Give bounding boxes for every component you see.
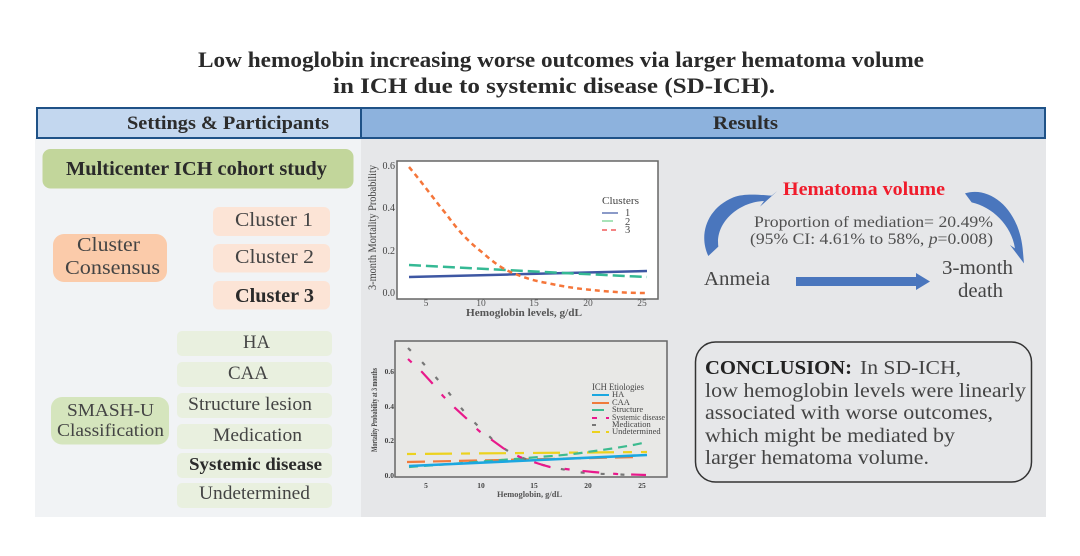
box: CAA <box>177 362 332 387</box>
label: hematoma volume: Hematoma volume <box>783 179 945 200</box>
legend: clusters: 2 <box>625 217 630 228</box>
heading: settings and participants <box>37 108 361 138</box>
chart: mortality by ICH etiology: Mortality Probability at 3 months <box>370 368 379 452</box>
chart: mortality by ICH etiology: 0.0 <box>385 471 394 480</box>
legend: ICH etiologies: Medication <box>612 419 651 429</box>
heading: results <box>361 108 1045 138</box>
arrow: hematoma volume to death <box>965 192 1024 263</box>
box: cluster 2 <box>213 244 330 272</box>
callout: conclusion: CONCLUSION: <box>705 358 852 379</box>
legend: ICH etiologies <box>592 383 665 436</box>
chart: mortality by ICH etiology: Hemoglobin, g/dL <box>497 489 562 499</box>
chart: mortality by ICH etiology: 20 <box>584 481 592 490</box>
line: CAA <box>407 457 640 462</box>
chart: 3-month mortality by cluster <box>367 161 658 319</box>
chart: 3-month mortality by cluster: 20 <box>583 299 593 309</box>
text: confidence interval: (95% CI: 4.61% to 58%, p=0.008) <box>750 231 993 248</box>
chart: 3-month mortality by cluster: 0.4 <box>382 203 395 214</box>
study box: multicenter ICH cohort study <box>42 149 354 188</box>
box: cluster 3 <box>213 281 330 310</box>
line: HA <box>409 455 647 466</box>
box: undetermined: Undetermined <box>199 484 311 504</box>
legend: ICH etiologies: Undetermined <box>612 426 661 436</box>
callout: conclusion: larger hematoma volume. <box>705 447 929 469</box>
chart: 3-month mortality by cluster: 0.2 <box>382 246 395 257</box>
label: 3-month death: 3-month <box>942 257 1013 279</box>
legend: clusters: 1 <box>625 208 630 219</box>
legend: ICH etiologies: Structure <box>612 404 643 414</box>
box: cluster consensus: Cluster <box>77 234 140 256</box>
panel: settings and participants <box>35 108 361 517</box>
chart: 3-month mortality by cluster: 25 <box>637 299 647 309</box>
panel: results <box>361 108 1046 517</box>
chart: mortality by ICH etiology: 0.4 <box>385 402 394 411</box>
chart: 3-month mortality by cluster: 15 <box>529 299 539 309</box>
box: structure lesion <box>177 393 332 418</box>
legend: clusters: Clusters <box>602 196 639 207</box>
callout: conclusion: low hemoglobin levels were linearly <box>705 380 1026 402</box>
box: cluster consensus: Consensus <box>65 257 160 279</box>
box: medication <box>177 424 332 449</box>
study box: multicenter ICH cohort study: Multicenter ICH cohort study <box>66 158 327 180</box>
chart: mortality by ICH etiology: 5 <box>424 481 428 490</box>
box: HA <box>177 331 332 356</box>
label: anemia: Anmeia <box>704 268 770 290</box>
box: SMASH-U classification: Classification <box>57 420 164 440</box>
legend: clusters <box>602 196 639 236</box>
line: cluster 2 <box>409 265 647 277</box>
box: medication: Medication <box>213 426 302 446</box>
chart: 3-month mortality by cluster: 5 <box>424 299 429 309</box>
box: cluster 2: Cluster 2 <box>235 246 314 268</box>
label: 3-month death <box>942 257 1013 302</box>
chart: 3-month mortality by cluster: 3-month Mortality Probability <box>367 165 379 290</box>
legend: ICH etiologies: HA <box>612 389 625 399</box>
chart: 3-month mortality by cluster: 0.0 <box>382 288 395 299</box>
chart: mortality by ICH etiology <box>370 341 667 499</box>
legend: ICH etiologies: ICH Etiologies <box>592 383 644 393</box>
box: HA: HA <box>243 333 271 353</box>
box: cluster 1 <box>213 207 330 236</box>
box: undetermined <box>177 483 332 508</box>
heading: results: Results <box>713 113 778 134</box>
label: 3-month death: death <box>958 280 1003 302</box>
line: cluster 1 <box>409 271 647 277</box>
box: SMASH-U classification <box>51 397 169 444</box>
chart: mortality by ICH etiology: 0.2 <box>385 436 394 445</box>
callout: conclusion: In SD-ICH, <box>860 357 961 379</box>
chart: mortality by ICH etiology: 15 <box>530 481 538 490</box>
chart: 3-month mortality by cluster: 10 <box>476 299 486 309</box>
legend: clusters: 3 <box>625 225 630 236</box>
box: systemic disease <box>177 453 332 478</box>
title: Low hemoglobin increasing worse outcomes via larger hematoma volume <box>198 47 924 72</box>
heading: settings and participants: Settings & Participants <box>127 113 329 134</box>
box: CAA: CAA <box>228 364 269 384</box>
title <box>198 47 924 98</box>
box: cluster 1: Cluster 1 <box>235 209 313 231</box>
box: cluster consensus <box>53 234 167 282</box>
line: medication <box>408 348 630 475</box>
arrow: anemia to hematoma volume <box>704 191 777 256</box>
chart: 3-month mortality by cluster: Hemoglobin levels, g/dL <box>466 307 582 319</box>
legend: ICH etiologies: Systemic disease <box>612 412 665 422</box>
callout: conclusion <box>696 342 1032 482</box>
callout: conclusion: which might be mediated by <box>705 425 955 447</box>
box: cluster 3: Cluster 3 <box>235 285 314 307</box>
box: structure lesion: Structure lesion <box>188 395 312 415</box>
title: in ICH due to systemic disease (SD-ICH). <box>333 73 775 98</box>
chart: mortality by ICH etiology: 0.6 <box>385 367 394 376</box>
box: systemic disease: Systemic disease <box>189 454 322 474</box>
arrow: anemia to death <box>796 273 930 290</box>
chart: mortality by ICH etiology: 10 <box>477 481 485 490</box>
box: SMASH-U classification: SMASH-U <box>67 400 154 420</box>
text: proportion of mediation: Proportion of mediation= 20.49% <box>754 214 993 231</box>
legend: ICH etiologies: CAA <box>612 397 631 407</box>
line: cluster 3 <box>409 167 647 293</box>
chart: 3-month mortality by cluster: 0.6 <box>382 161 395 172</box>
line: systemic disease <box>408 359 646 475</box>
line: undetermined <box>407 452 647 454</box>
chart: mortality by ICH etiology: 25 <box>638 481 646 490</box>
line: structure <box>409 442 647 467</box>
callout: conclusion: associated with worse outcomes, <box>705 402 993 424</box>
